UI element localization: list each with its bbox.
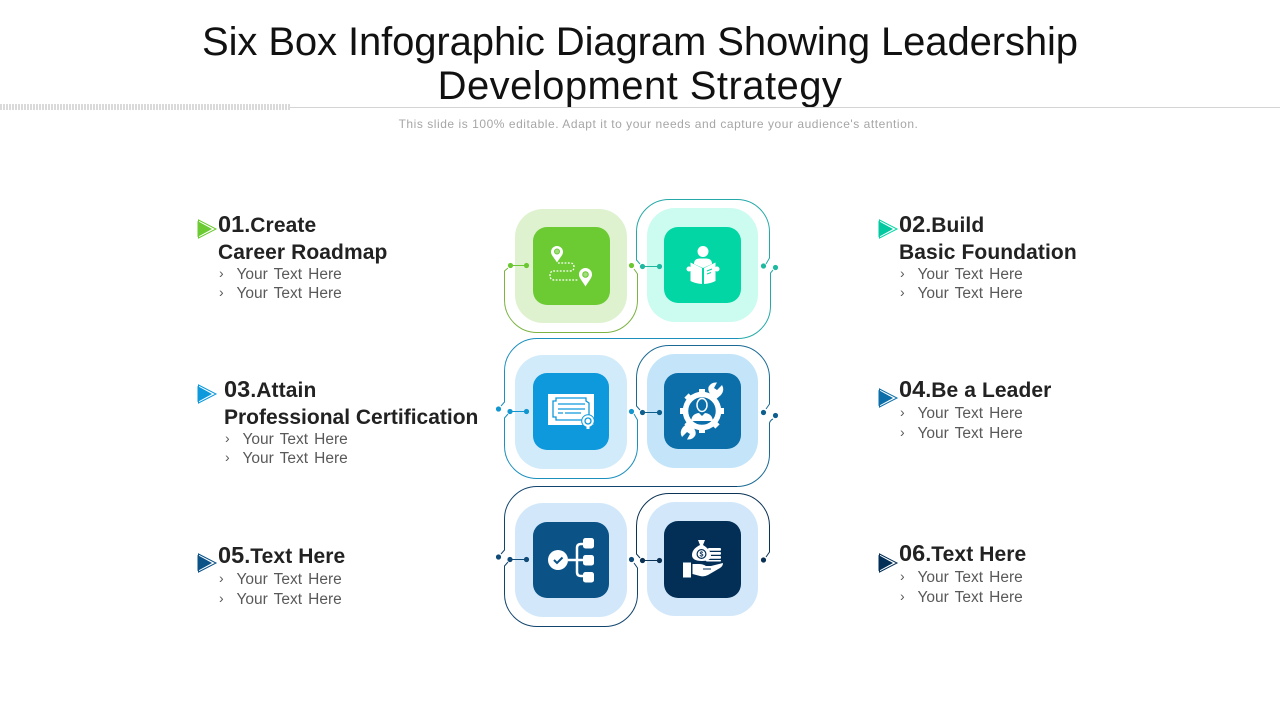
arrow 05 (198, 554, 216, 572)
item 03 (198, 376, 478, 467)
item 06: › (900, 568, 905, 584)
arrow 06 (878, 554, 897, 572)
connector line: box 4 (636, 346, 778, 486)
item 02: Your Text Here (918, 266, 1023, 283)
icon: checkmark with branching nodes (548, 538, 594, 582)
connector line: box 2 (636, 200, 778, 338)
icon: gear with person and wrenches (680, 382, 724, 440)
item 06: Your Text Here (918, 589, 1023, 606)
icon: hand holding money bag and coins: $ (700, 552, 704, 558)
item 02: Basic Foundation (899, 241, 1077, 264)
subtitle: This slide is 100% editable. Adapt it to your needs and capture your audience's attention. (399, 117, 918, 131)
title: Six Box Infographic Diagram Showing Leadership (202, 20, 1078, 64)
title: Development Strategy (438, 64, 842, 108)
connector line: box 3 (496, 338, 738, 478)
item 04: Your Text Here (918, 425, 1023, 442)
item 01: Your Text Here (236, 266, 342, 283)
item 06: › (900, 588, 905, 604)
item 06: Your Text Here (918, 569, 1023, 586)
item 04: 04.Be a Leader (899, 376, 1051, 402)
icon: certificate with seal (548, 394, 594, 429)
item 04: › (900, 404, 905, 420)
item 06 (878, 540, 1026, 606)
item 03: 03.Attain (224, 376, 316, 402)
item 02: 02.Build (899, 211, 984, 237)
item 02: Your Text Here (918, 285, 1023, 302)
item 05 (198, 542, 345, 608)
box 5: navy hierarchy (515, 503, 627, 617)
item 04 (878, 376, 1051, 442)
item 04: Your Text Here (918, 405, 1023, 422)
item 06: 06.Text Here (899, 540, 1026, 566)
item 03: Your Text Here (242, 450, 348, 467)
icon: route with map pins (550, 246, 592, 286)
item 04: › (900, 424, 905, 440)
connector line: box 5 (496, 486, 737, 626)
item 01: › (219, 284, 224, 300)
icon: person reading a book (686, 246, 720, 284)
arrow 02 (878, 220, 897, 238)
item 03: Professional Certification (224, 406, 478, 429)
item 01: 01.Create (218, 211, 316, 237)
item 03: › (225, 430, 230, 446)
item 05: Your Text Here (236, 571, 342, 588)
box 6: deep navy hand and money (647, 502, 758, 616)
item 02: › (900, 284, 905, 300)
arrow 01 (198, 220, 216, 238)
box 3: blue certificate (515, 355, 627, 469)
item 05: › (219, 590, 224, 606)
item 03: Your Text Here (242, 431, 348, 448)
arrow 03 (198, 385, 216, 403)
item 02 (878, 211, 1077, 302)
item 01 (198, 211, 387, 302)
item 02: › (900, 265, 905, 281)
item 05: Your Text Here (236, 591, 342, 608)
title (202, 20, 1078, 108)
item 05: 05.Text Here (218, 542, 345, 568)
item 01: Career Roadmap (218, 241, 387, 264)
item 03: › (225, 449, 230, 465)
header rule (0, 106, 1280, 108)
connector line: box 1 (504, 263, 638, 332)
box 2: teal reader (647, 208, 758, 322)
box 4: dark blue gear (647, 354, 758, 468)
item 01: Your Text Here (236, 285, 342, 302)
item 05: › (219, 570, 224, 586)
item 01: › (219, 265, 224, 281)
connector line: box 6 (636, 494, 770, 563)
arrow 04 (878, 389, 897, 407)
box 1: green map (515, 209, 627, 323)
